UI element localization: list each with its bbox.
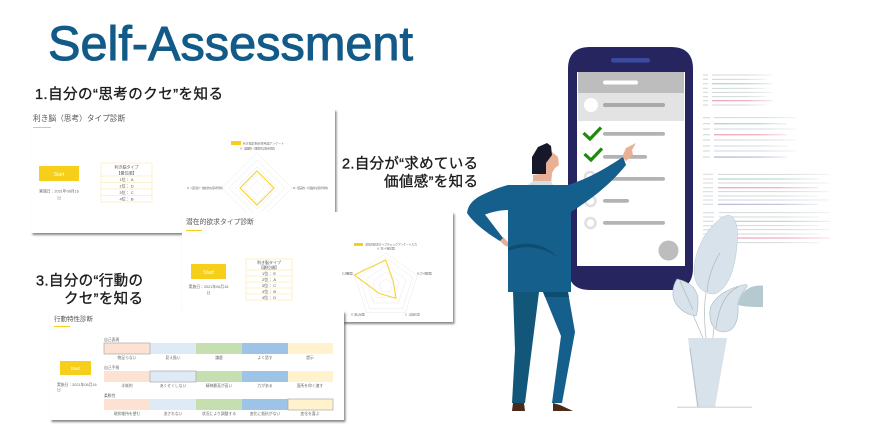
heading 3: クセ”を知る: [64, 290, 143, 308]
panel 1 table: 1位： D: [119, 182, 134, 188]
panel 2 radar chart: D：楽しみの型: [351, 312, 365, 316]
panel 1 radar chart: 利き脳診断析算用語アンケート: [243, 140, 284, 146]
list lines: [603, 132, 665, 225]
panel 2 radar chart: [342, 242, 432, 316]
panel 2 table: 3位： C: [262, 282, 276, 288]
shoes: [512, 403, 573, 411]
panel 2 start button: Start: [203, 270, 214, 276]
decorative text lines: group 1: [703, 75, 772, 105]
panel: dominant brain type diagnosis: [31, 109, 335, 233]
panel 1 date: 実施日：2021年06月16: [39, 188, 79, 194]
panel 3 heading: [54, 314, 94, 327]
panel 1 radar chart: D：感覚的・独創的な思考傾向: [187, 185, 223, 190]
decorative text lines: group 4: [703, 212, 830, 243]
panel 2 heading: [186, 217, 254, 231]
heading 3: [36, 272, 143, 308]
back leaf: [738, 285, 763, 307]
radio circles: [585, 172, 596, 228]
trait row: self evaluation: 力がある: [257, 383, 273, 388]
left leaf: [673, 279, 698, 316]
heading 2: 価値感”を知る: [384, 174, 478, 190]
panel 2 radar chart: B：力・代表の型: [417, 270, 432, 276]
panel 2 table: [246, 259, 292, 300]
trait row: self evaluation: 半耗的: [121, 383, 133, 388]
jacket: [467, 157, 626, 292]
panel 3 heading: 行動特性診断: [54, 314, 94, 323]
icon: green check marks: [584, 128, 602, 160]
panel 1 table: 3位： C: [119, 189, 134, 195]
panel 2 table: 4位： B: [262, 288, 276, 294]
title: Self-Assessment: [48, 18, 413, 71]
panel 1 table: [101, 163, 152, 202]
panel 1 start button: Start: [54, 172, 65, 178]
trait row: self expression: [104, 337, 333, 360]
panel 2 heading: 潜在的欲求タイプ診断: [186, 217, 254, 226]
panel 2 date: [189, 284, 228, 295]
panel 1 start button: [39, 166, 79, 181]
panel 3 start button: [60, 361, 91, 375]
panel 2 start button: [191, 264, 226, 279]
trait row: flexibility: 変化に抵抗がない: [250, 411, 280, 416]
panel 1 heading: [33, 113, 126, 128]
panel 1 heading: 利き脳（思考）タイプ診断: [33, 113, 126, 123]
trait row: self expression: 提示: [306, 355, 314, 360]
pot: [677, 338, 752, 408]
heading 3: 3.自分の“行動の: [36, 272, 143, 290]
decorative text lines: group 2: [703, 117, 795, 158]
panel 2 table: 利き脳タイプ: [257, 259, 281, 265]
panel 2 table: 1位： E: [262, 270, 276, 276]
hands: [500, 143, 636, 247]
head: [528, 143, 559, 185]
panel: latent desire type diagnosis: [182, 212, 453, 322]
trait row: self evaluation: 面所を仰く速す: [297, 383, 323, 388]
trait row: self expression: 見え扱い: [165, 355, 181, 360]
trait row: self evaluation: 精神最高が高い: [206, 383, 232, 388]
selected row: [578, 93, 684, 121]
panel: behavioural traits diagnosis: [50, 311, 344, 420]
person pointing at phone: [467, 143, 636, 411]
panel 1 table: 4位： B: [119, 196, 134, 202]
panel 1 table: 利き脳タイプ: [114, 164, 138, 170]
trait row: flexibility: 現状維持を望む: [114, 411, 140, 416]
panel 3 date: 実施日：2021年06月16: [57, 382, 97, 387]
panel 3 date: 日: [57, 388, 61, 392]
trait row: self evaluation: 自己手柄: [104, 365, 119, 370]
right leaf: [710, 285, 747, 332]
panel 1 table: 1位： A: [119, 176, 134, 182]
trait row: flexibility: 変化を喜ぶ: [301, 411, 320, 416]
panel 2 table: 【最位順】: [259, 264, 279, 270]
plant: [673, 215, 763, 408]
panel 2 date: 実施日：2021年06月16: [189, 284, 228, 289]
heading 2: [342, 156, 478, 190]
panel 1 date: 日: [57, 196, 61, 200]
panel 2 radar chart: E：成長の型: [342, 270, 353, 276]
panel 3 date: [57, 382, 97, 392]
round button: [658, 240, 678, 260]
panel 1 date: [39, 188, 79, 200]
phone screen header: [578, 72, 684, 93]
trait row: self evaluation: [104, 365, 333, 388]
trait row: self evaluation: あくせくしない: [160, 383, 186, 388]
stems: [678, 280, 724, 338]
panel 1 radar chart: B：堅実的・計画的な思考傾向: [293, 185, 328, 190]
panel 2 radar chart: 潜在的欲求タイプチェックアンケート入力: [365, 242, 417, 246]
panel 1 radar chart: [187, 140, 328, 223]
trait row: self expression: よく話す: [257, 355, 273, 360]
trait row: self expression: 物足らない: [118, 355, 137, 360]
panel 2 table: 4位： D: [262, 294, 276, 300]
big leaf: [694, 215, 738, 294]
trait row: flexibility: 柔軟性: [104, 393, 116, 398]
trait row: self expression: 自己表現: [104, 337, 119, 342]
heading 1: 1.自分の“思考のクセ”を知る: [35, 86, 223, 103]
heading 2: 2.自分が“求めている: [342, 156, 478, 172]
panel 2 table: 2位： A: [262, 276, 276, 282]
panel 2 radar chart: A：影・行動の型: [377, 246, 395, 250]
panel 2 date: 日: [207, 291, 211, 295]
trait row: flexibility: 流されない: [164, 411, 183, 416]
trait row: flexibility: 状況により調整する: [202, 411, 236, 416]
trait row: flexibility: [104, 393, 333, 416]
legs: [512, 292, 575, 403]
decorative text lines: group 3: [703, 174, 829, 205]
panel 1 table: 【最位順】: [116, 170, 136, 176]
panel 1 radar chart: A：論理的・理性的な思考傾向: [240, 146, 275, 150]
panel 2 radar chart: C：自由の型: [405, 312, 420, 316]
trait row: self expression: 謙虚: [215, 355, 223, 360]
panel 3 start button: Start: [71, 366, 81, 371]
phone: [568, 47, 693, 290]
